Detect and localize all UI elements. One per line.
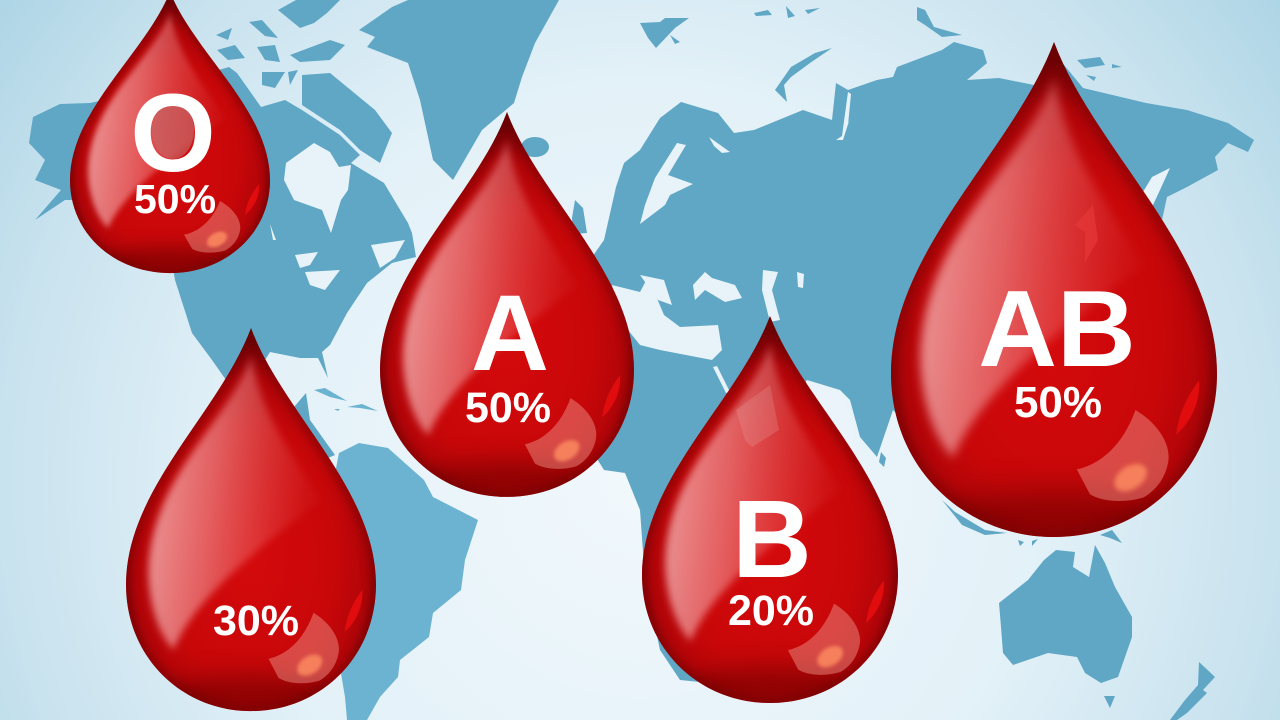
drop body AB (891, 42, 1217, 544)
letter AB: AB (978, 268, 1136, 390)
map: Great Lakes (270, 224, 405, 290)
percent B: 20% (728, 587, 814, 635)
drop: unlabeled 30% (126, 328, 376, 716)
reflection B (736, 385, 779, 447)
map: Southeast Asia islands (879, 452, 1122, 546)
letter O counter (152, 101, 194, 159)
map: UK and Ireland (560, 200, 587, 234)
map: North America (29, 67, 416, 470)
flare AB (1075, 205, 1098, 262)
drop: O 50% (70, 0, 270, 277)
map: Caribbean (314, 388, 378, 411)
map: Australia (999, 545, 1132, 708)
percent O: 50% (134, 176, 216, 222)
map: seas of Eurasia (612, 92, 1170, 393)
map: South America (320, 443, 478, 720)
letter B: B (732, 478, 812, 601)
percent A: 50% (465, 384, 551, 432)
drop body A (380, 112, 634, 502)
drop body 30% (126, 328, 376, 716)
drop: B 20% (642, 316, 898, 708)
map: Eurasia and Africa (560, 42, 1254, 682)
map: Iceland (521, 137, 549, 157)
percent AB: 50% (1014, 378, 1102, 427)
drop: A 50% (380, 112, 634, 502)
map: Greenland (359, 0, 559, 180)
drop body B (642, 316, 898, 708)
letter O: O (130, 72, 216, 195)
map: Hudson Bay (284, 143, 351, 233)
drop: AB 50% (891, 42, 1217, 544)
letter A: A (471, 272, 549, 393)
map: New Zealand (1170, 662, 1215, 720)
map: Arctic Eurasian islands (640, 6, 1122, 81)
percent 30%: 30% (213, 597, 299, 645)
map: Arctic islands (216, 0, 392, 163)
drop body O (70, 0, 270, 277)
map: Novaya Zemlya (775, 48, 832, 102)
